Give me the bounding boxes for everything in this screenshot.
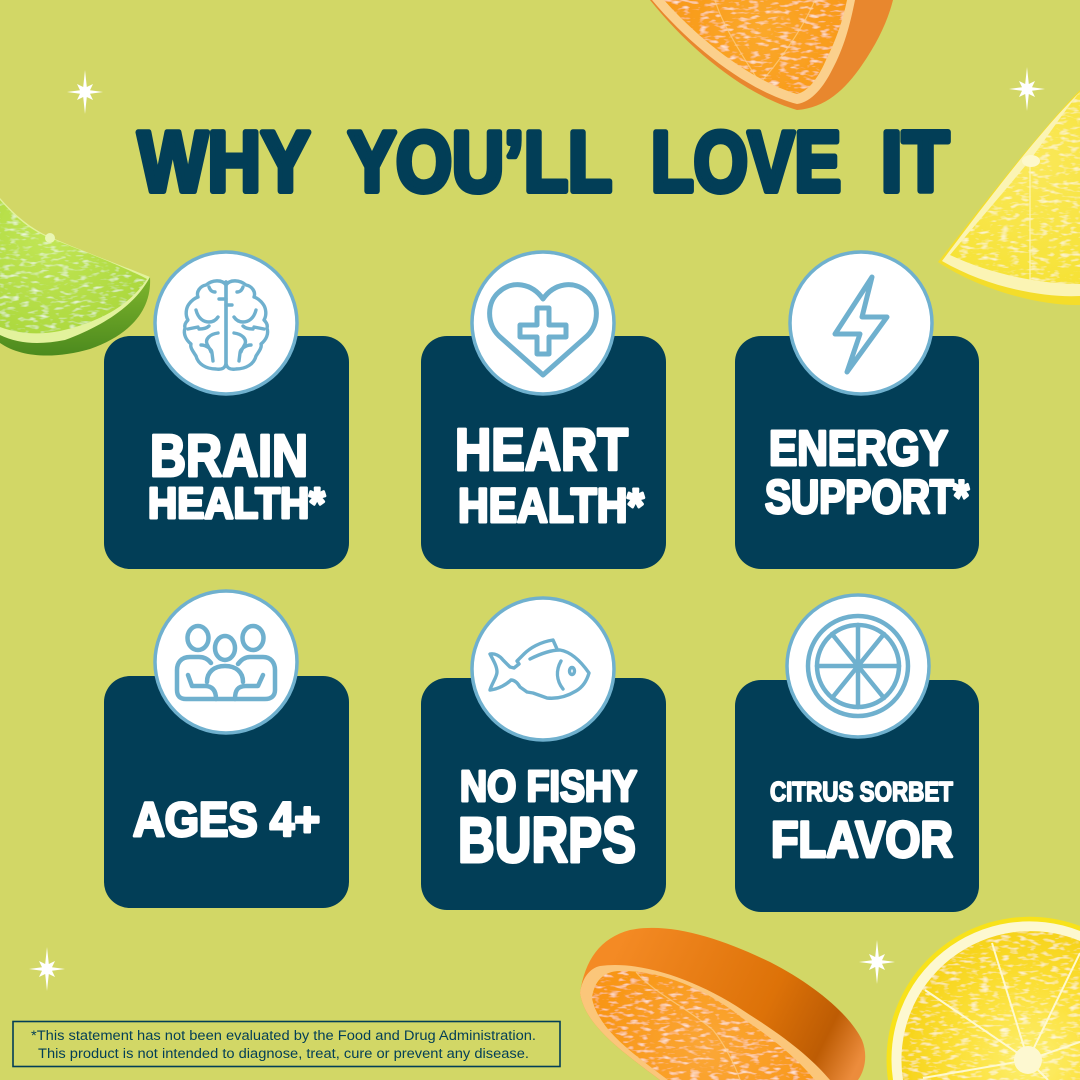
label: BRAIN xyxy=(150,423,308,489)
icon: family xyxy=(155,591,297,733)
card: no fishy burps xyxy=(421,598,666,910)
title: WHY xyxy=(138,115,310,210)
card: energy support xyxy=(735,252,979,569)
label: CITRUS SORBET xyxy=(770,776,953,807)
label: FLAVOR xyxy=(771,811,953,868)
icon: brain xyxy=(155,252,297,394)
title: LOVE xyxy=(651,115,841,210)
fruit: orange slice bottom xyxy=(580,928,865,1080)
label: AGES 4+ xyxy=(133,794,320,847)
disclaimer box: This product is not intended to diagnose, treat, cure or prevent any disease. xyxy=(38,1046,529,1061)
icon: citrus slice xyxy=(787,595,929,737)
fruit: lime wedge left xyxy=(0,198,150,356)
icon: fish xyxy=(472,598,614,740)
label: NO FISHY xyxy=(460,762,637,811)
fruit: lemon slice bottom right xyxy=(887,917,1080,1080)
disclaimer box xyxy=(13,1022,560,1066)
label xyxy=(148,423,326,528)
disclaimer box: *This statement has not been evaluated by the Food and Drug Administration. xyxy=(31,1028,536,1043)
card: brain health xyxy=(104,252,349,569)
label: ENERGY xyxy=(769,422,948,476)
label xyxy=(765,422,970,523)
card: ages 4+ xyxy=(104,591,349,908)
title xyxy=(138,115,949,210)
label xyxy=(770,776,953,868)
icon: lightning bolt xyxy=(790,252,932,394)
fruit: lemon wedge right xyxy=(938,90,1080,305)
card: heart health xyxy=(421,252,666,569)
title: YOU’LL xyxy=(348,115,612,210)
label xyxy=(455,417,644,533)
icon: heart with cross xyxy=(472,252,614,394)
label xyxy=(458,762,637,876)
label: HEALTH* xyxy=(458,480,644,533)
title: IT xyxy=(881,115,949,210)
label: HEALTH* xyxy=(148,479,326,528)
fruit: orange wedge top xyxy=(650,0,893,110)
label: HEART xyxy=(455,417,628,483)
label: BURPS xyxy=(458,804,636,876)
label: SUPPORT* xyxy=(765,470,970,523)
card: citrus sorbet flavor xyxy=(735,595,979,912)
